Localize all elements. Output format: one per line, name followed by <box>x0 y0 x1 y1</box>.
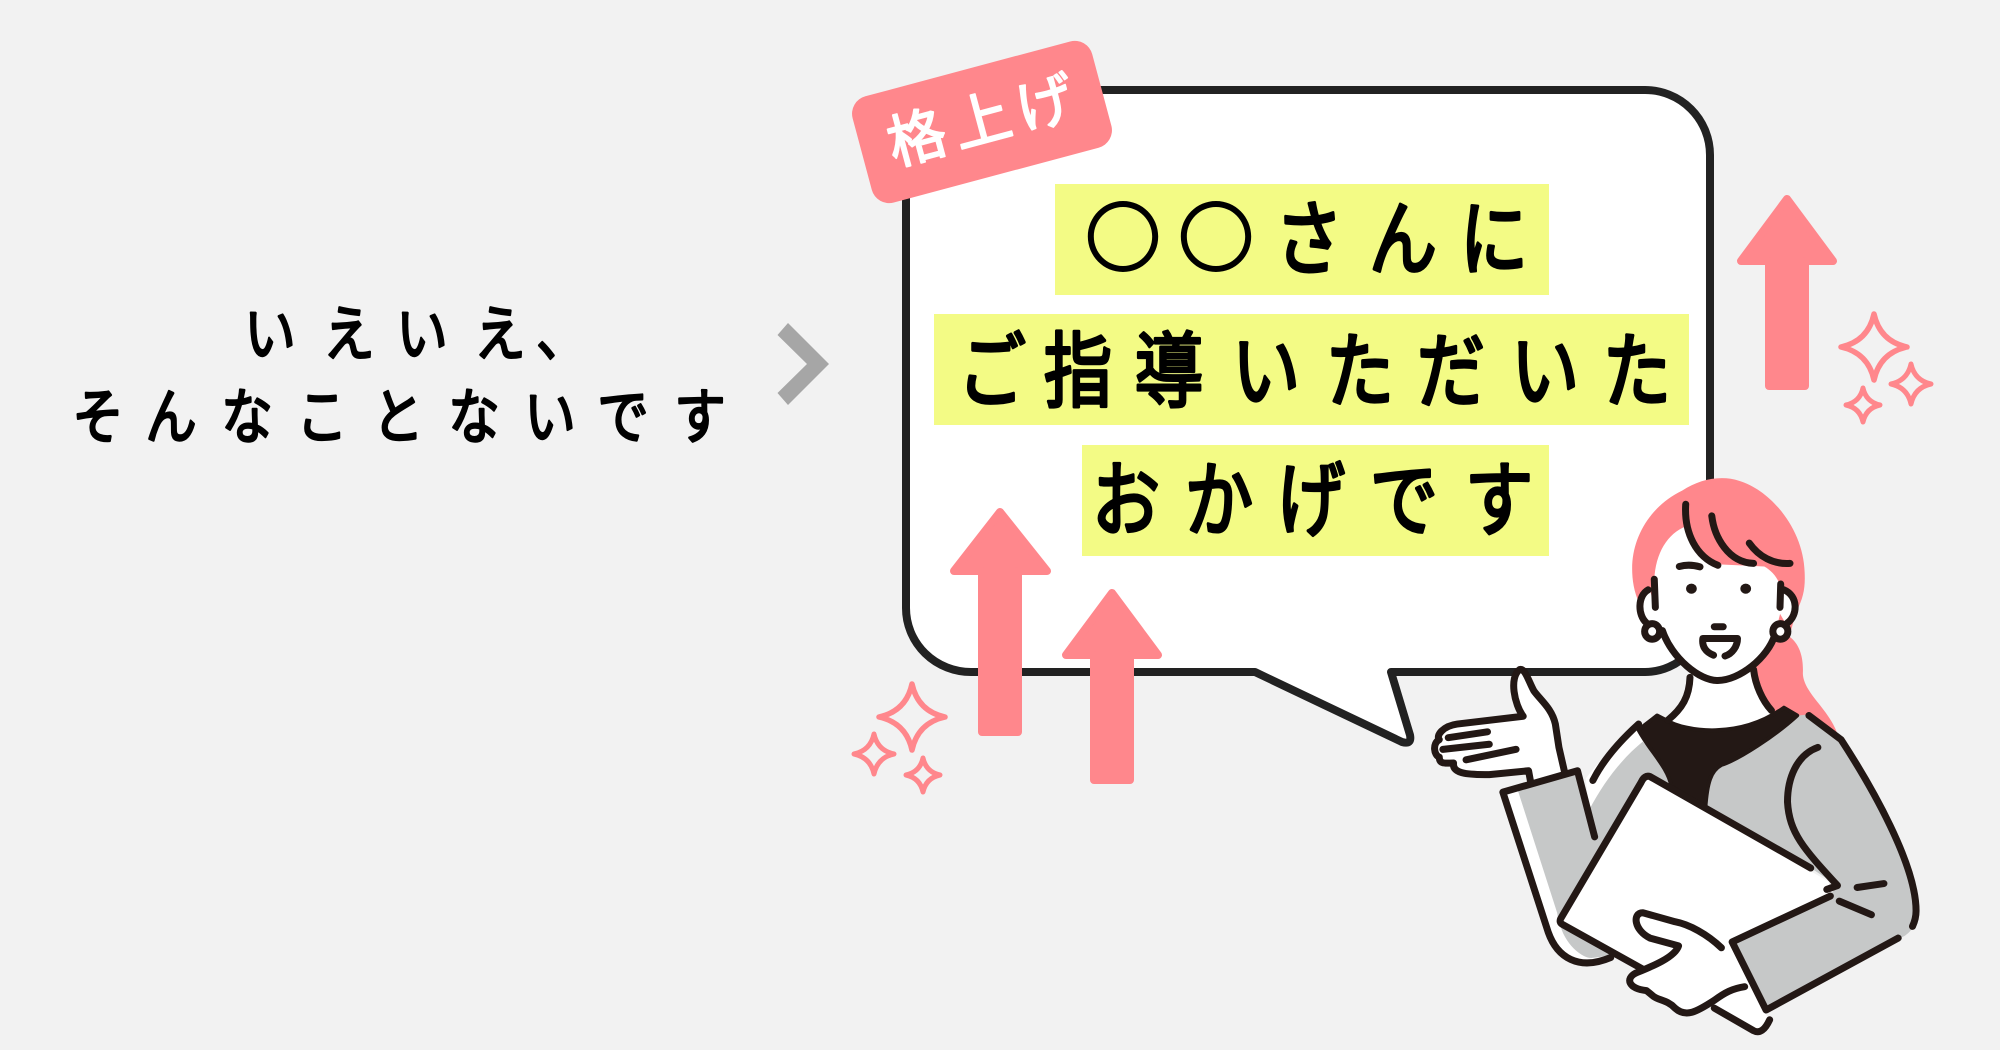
eyebrow <box>1679 565 1700 567</box>
text: left statement: いえいえ、 <box>244 300 588 368</box>
line work <box>1435 504 1916 1032</box>
pointing hand fill <box>1435 669 1566 780</box>
arrow: lower middle <box>1066 593 1158 780</box>
badge: tag <box>848 37 1116 207</box>
ear fills <box>1640 590 1795 627</box>
line 1 highlight <box>1055 184 1549 295</box>
icon: sparkles lower left <box>854 684 945 792</box>
holding hand fill <box>1630 913 1745 1013</box>
neck lines <box>1668 670 1771 720</box>
illustration: woman holding folder <box>1435 478 1918 1032</box>
arrow: upper right <box>1741 199 1833 386</box>
arrow: lower left <box>954 512 1047 732</box>
mouth <box>1703 638 1737 656</box>
text: left statement: そんなことないです <box>72 383 726 451</box>
highlighted message <box>934 184 1689 556</box>
nose <box>1714 623 1723 630</box>
face <box>1654 526 1781 680</box>
line 3 highlight <box>1082 445 1549 556</box>
text: left statement <box>72 300 726 451</box>
inner top <box>1639 708 1797 808</box>
face sides and jaw <box>1654 579 1781 680</box>
neck <box>1668 670 1771 732</box>
icon: sparkles upper right <box>1841 314 1931 422</box>
pointing hand outline <box>1435 669 1564 780</box>
folder <box>1561 777 1830 1032</box>
earrings <box>1645 624 1788 639</box>
hair <box>1632 478 1837 734</box>
eyes <box>1686 584 1751 594</box>
jacket outline right <box>1787 715 1916 926</box>
text: line 3: おかげです <box>1092 456 1533 548</box>
text: line 2: ご指導いただいた <box>958 327 1671 419</box>
holding hand outline <box>1630 913 1745 1013</box>
bangs <box>1686 504 1790 565</box>
left sleeve outline <box>1503 724 1639 963</box>
left sleeve <box>1516 742 1671 958</box>
icon: chevron arrow <box>778 323 829 405</box>
text: line 1: さんに <box>1275 195 1528 287</box>
ears <box>1640 590 1795 623</box>
text: line 1 circles: 〇〇 <box>1084 195 1255 283</box>
white collar sliver <box>1586 724 1643 810</box>
panel: speech bubble <box>906 90 1710 743</box>
folder outline <box>1560 776 1811 1032</box>
line 2 highlight <box>934 314 1689 425</box>
sleeve highlight <box>1503 788 1611 963</box>
badge: tag: 格上げ <box>881 66 1082 178</box>
right cuff <box>1732 896 1898 1010</box>
jacket body <box>1637 714 1918 1010</box>
